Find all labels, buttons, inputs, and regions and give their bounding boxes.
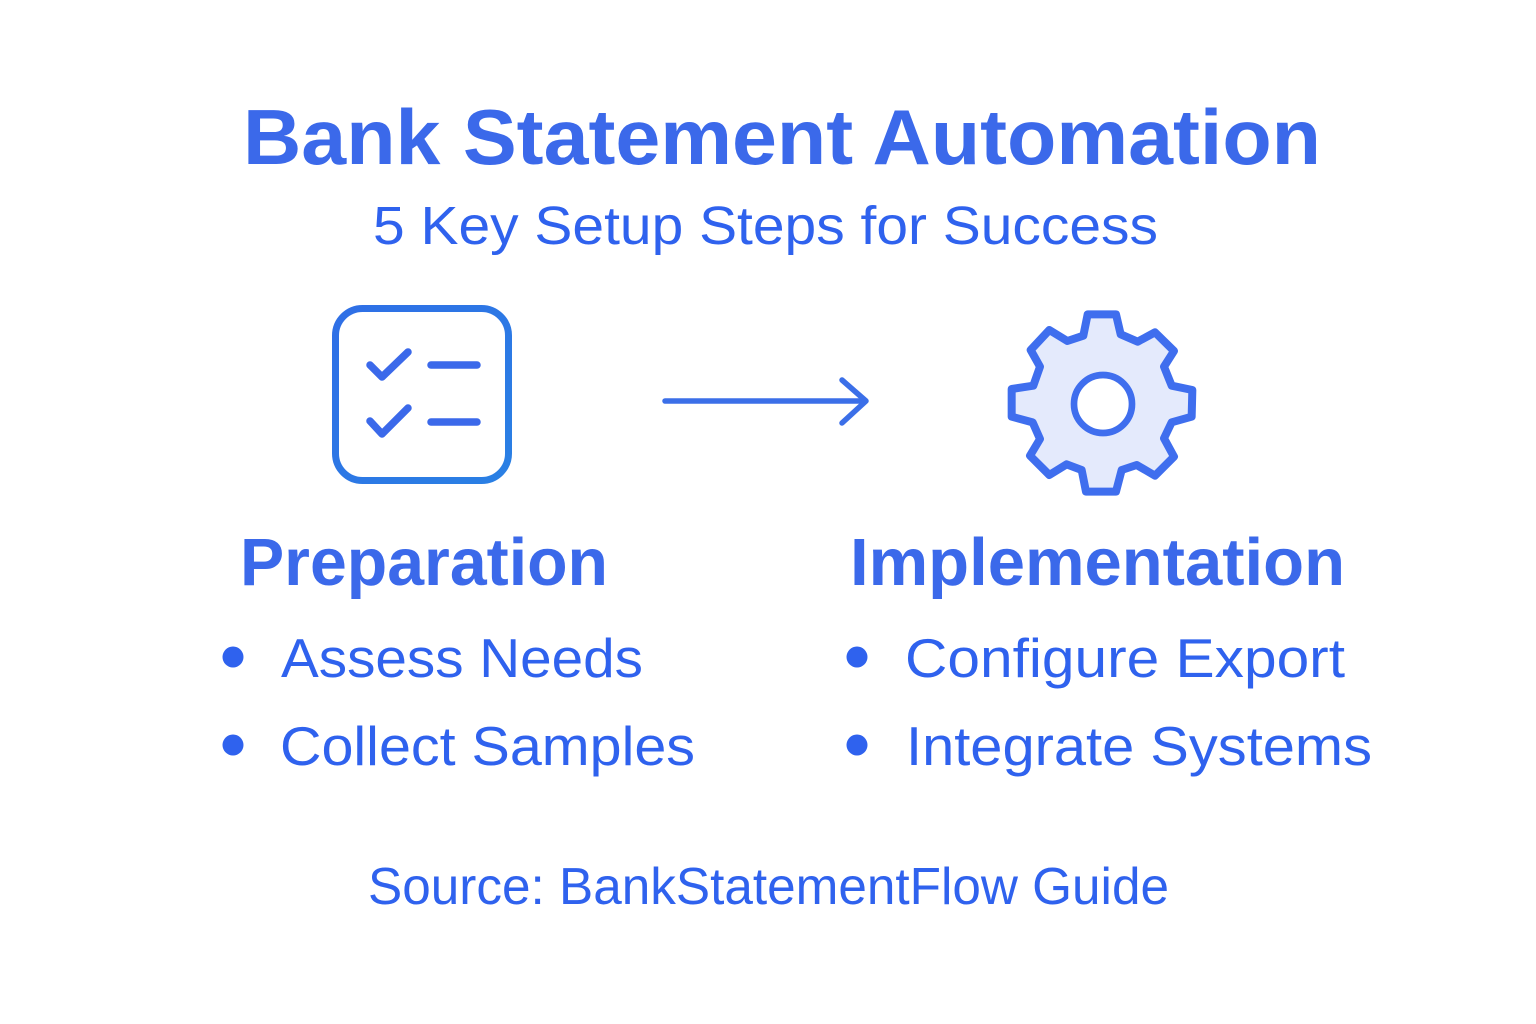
- arrow: [665, 380, 866, 423]
- icon: gear: [1012, 314, 1192, 492]
- panel: implementation: [846, 525, 1372, 777]
- subtitle: 5 Key Setup Steps for Success: [373, 196, 1158, 256]
- icon: checklist: [336, 308, 508, 480]
- list item: configure export: Configure Export: [905, 627, 1345, 689]
- list item: assess needs: Assess Needs: [281, 627, 643, 689]
- list item: integrate systems: Integrate Systems: [906, 715, 1372, 777]
- heading: preparation: Preparation: [240, 525, 608, 600]
- list item: collect samples: Collect Samples: [280, 715, 695, 777]
- heading: implementation: Implementation: [850, 525, 1345, 600]
- title: Bank Statement Automation: [243, 93, 1321, 181]
- panel: preparation: [222, 525, 695, 777]
- source note: Source: BankStatementFlow Guide: [368, 858, 1169, 916]
